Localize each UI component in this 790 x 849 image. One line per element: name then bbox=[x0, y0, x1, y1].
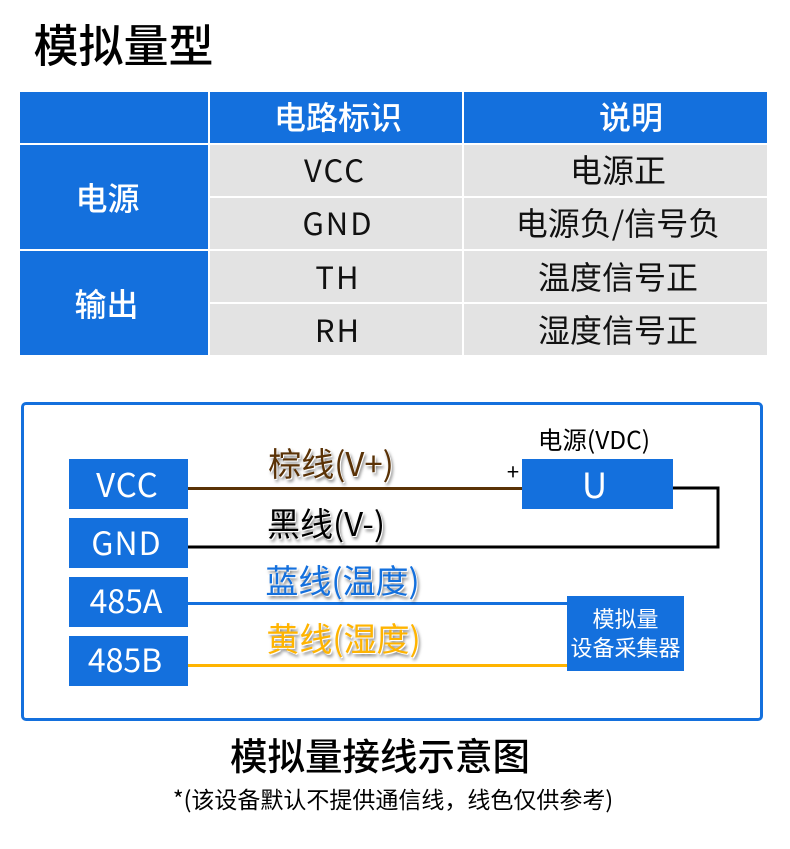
terminal GND bbox=[69, 518, 188, 568]
cell temperature signal: 温度信号正 bbox=[538, 252, 698, 298]
wire label yellow: 黄线(湿度) bbox=[266, 613, 421, 661]
power box U bbox=[522, 459, 673, 509]
cell TH bbox=[210, 251, 462, 302]
terminal VCC: VCC bbox=[96, 459, 159, 507]
wire label brown: 棕线(V+) bbox=[268, 438, 394, 486]
cell power negative bbox=[464, 198, 767, 249]
row group: output: 输出 bbox=[74, 280, 138, 326]
row group: output bbox=[20, 251, 208, 355]
collector box: 设备采集器 bbox=[570, 630, 680, 662]
cell humidity signal: 湿度信号正 bbox=[538, 306, 698, 352]
wire label black: 黑线(V-) bbox=[267, 498, 385, 546]
cell humidity signal bbox=[464, 304, 767, 355]
wire: brown bbox=[188, 487, 522, 490]
table header: description: 说明 bbox=[599, 92, 663, 138]
wire: blue bbox=[188, 602, 567, 605]
collector box bbox=[567, 596, 684, 671]
power box U: U bbox=[582, 458, 607, 508]
cell VCC: VCC bbox=[304, 146, 366, 191]
terminal 485B bbox=[69, 636, 188, 686]
cell RH bbox=[210, 304, 462, 355]
cell VCC bbox=[210, 145, 462, 196]
table header: circuit label: 电路标识 bbox=[274, 92, 402, 138]
table header: circuit label bbox=[210, 92, 462, 143]
footnote: *(该设备默认不提供通信线，线色仅供参考) bbox=[173, 781, 613, 815]
wire label blue: 蓝线(温度) bbox=[265, 555, 420, 603]
power label: 电源(VDC) bbox=[538, 422, 650, 456]
cell power negative: 电源负/信号负 bbox=[516, 198, 720, 244]
wire: black bbox=[188, 488, 718, 547]
cell GND: GND bbox=[302, 199, 374, 244]
diagram caption: 模拟量接线示意图 bbox=[230, 726, 530, 780]
terminal 485A bbox=[69, 577, 188, 627]
terminal GND: GND bbox=[91, 519, 162, 565]
table bbox=[20, 92, 767, 355]
cell TH: TH bbox=[315, 253, 361, 298]
collector box: 模拟量 bbox=[592, 602, 658, 634]
cell power positive: 电源正 bbox=[570, 146, 666, 192]
terminal 485A: 485A bbox=[90, 577, 162, 623]
terminal 485B: 485B bbox=[88, 636, 162, 682]
title: 模拟量型 bbox=[34, 10, 214, 74]
table header: blank bbox=[20, 92, 208, 143]
row group: power: 电源 bbox=[75, 174, 140, 220]
cell temperature signal bbox=[464, 251, 767, 302]
cell GND bbox=[210, 198, 462, 249]
row group: power bbox=[20, 145, 208, 249]
cell RH: RH bbox=[315, 306, 361, 351]
cell power positive bbox=[464, 145, 767, 196]
panel: wiring diagram bbox=[21, 402, 763, 721]
table header: description bbox=[464, 92, 767, 143]
wire: yellow bbox=[188, 664, 567, 667]
plus sign: + bbox=[507, 455, 519, 487]
terminal VCC bbox=[69, 459, 188, 509]
